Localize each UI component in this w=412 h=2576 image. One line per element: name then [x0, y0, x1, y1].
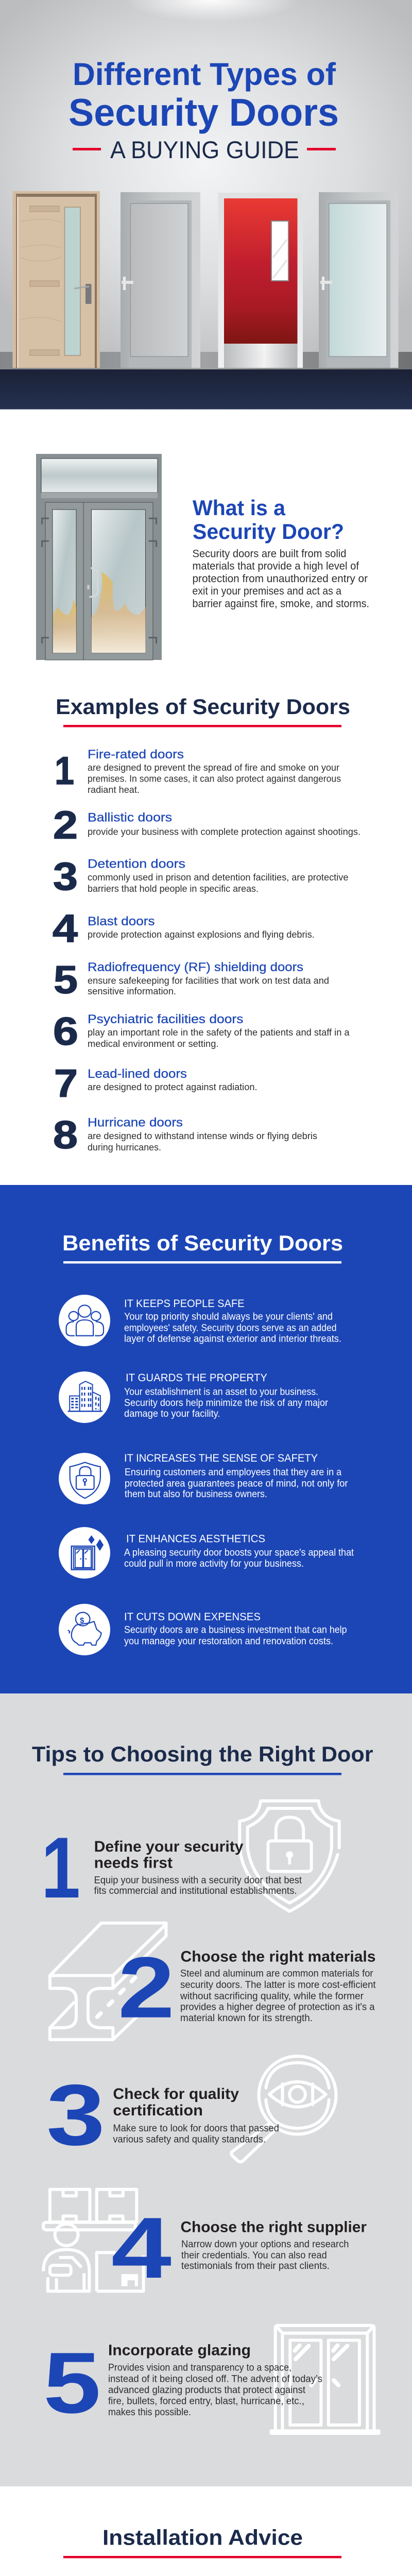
tip 1: Define your security: [94, 1838, 244, 1855]
tip 1: Equip your business with a security door that best: [94, 1875, 302, 1886]
list item 5: ensure safekeeping for facilities that work on test data and: [88, 976, 329, 986]
list item 2: [53, 804, 360, 847]
list item 5: [54, 958, 329, 1002]
tip 5: 5: [43, 2334, 101, 2431]
list item 5: Radiofrequency (RF) shielding doors: [88, 960, 303, 974]
heading: tips: Tips to Choosing the Right Door: [32, 1742, 373, 1766]
tip 3: 3: [46, 2066, 105, 2163]
tip 2: [118, 1939, 376, 2036]
list item 6: 6: [53, 1010, 78, 1054]
list item 3: [53, 855, 348, 899]
heading: benefits: Benefits of Security Doors: [62, 1231, 343, 1255]
benefit 1: employees' safety. Security doors serve as an added: [124, 1323, 337, 1333]
tip 4: testimonials from their past clients.: [181, 2261, 330, 2272]
door: red fire door: [218, 193, 303, 368]
list item 7: are designed to protect against radiation.: [88, 1082, 258, 1092]
tip 5: fire, bullets, forced entry, blast, hurricane, etc.,: [108, 2396, 304, 2406]
heading: what is a security door: Security Door?: [193, 519, 344, 544]
list item 3: 3: [53, 855, 78, 899]
tip 5: advanced glazing products that protect against: [108, 2385, 306, 2396]
heading: examples of security doors: Examples of Security Doors: [56, 694, 350, 719]
list item 8: Hurricane doors: [88, 1116, 183, 1130]
benefit 5: Security doors are a business investment that can help: [124, 1625, 347, 1635]
tip 2: security doors. The latter is more cost-efficient: [180, 1979, 376, 1991]
benefit 4: IT ENHANCES AESTHETICS: [126, 1533, 265, 1545]
tip 4: 4: [111, 2199, 171, 2296]
text block: definition: materials that provide a high level of: [193, 561, 359, 572]
tip 3: various safety and quality standards.: [113, 2134, 266, 2145]
tip 1: 1: [41, 1819, 80, 1916]
door: grey steel: [121, 192, 200, 368]
benefit 2: Your establishment is an asset to your business.: [124, 1387, 318, 1397]
panel: benefits of security doors: [0, 1185, 412, 1693]
tip 5: instead of it being closed off. The advent of today’s: [108, 2374, 322, 2384]
benefit 3: protected area guarantees peace of mind, not only for: [125, 1479, 348, 1489]
icon: people: [66, 1305, 104, 1336]
tip 3: certification: [113, 2102, 203, 2119]
list item 7: 7: [54, 1062, 78, 1106]
tip 2: Steel and aluminum are common materials for: [180, 1968, 373, 1979]
list item 4: 4: [53, 907, 78, 951]
text block: definition: [193, 548, 369, 609]
benefit 1: [59, 1295, 341, 1346]
icon: window outline: [271, 2326, 379, 2433]
benefit 2: [59, 1371, 329, 1423]
list item 1: radiant heat.: [88, 785, 140, 795]
list item 3: barriers that hold people in specific areas.: [88, 884, 259, 894]
benefit 5: you manage your restoration and renovation costs.: [124, 1636, 333, 1647]
panel: what is a security door: [0, 410, 412, 1185]
benefit 2: IT GUARDS THE PROPERTY: [126, 1372, 267, 1384]
benefit 1: layer of defense against exterior and interior threats.: [124, 1334, 341, 1345]
floor strip: [0, 352, 412, 369]
tip 4: Choose the right supplier: [180, 2219, 367, 2236]
benefit 4: [59, 1527, 354, 1579]
tip 2: 2: [118, 1939, 175, 2036]
list item 8: 8: [53, 1113, 78, 1157]
list item 1: premises. In some cases, it can also protect against dangerous: [88, 774, 341, 784]
tip 1: [41, 1819, 302, 1916]
benefit 5: [59, 1604, 347, 1655]
tip 3: Make sure to look for doors that passed: [113, 2123, 279, 2134]
benefit 1: Your top priority should always be your clients' and: [124, 1312, 333, 1322]
tip 3: Check for quality: [113, 2086, 239, 2103]
icon: piggy bank: [68, 1613, 101, 1645]
door: frosted glass: [319, 192, 399, 368]
tip 5: Provides vision and transparency to a space,: [108, 2363, 291, 2374]
icon: shield with lock: [70, 1462, 100, 1498]
list item 4: Blast doors: [88, 914, 154, 928]
benefit 2: Security doors help minimize the risk of any major: [124, 1398, 329, 1409]
benefit 3: IT INCREASES THE SENSE OF SAFETY: [124, 1452, 318, 1464]
list item 3: Detention doors: [88, 857, 185, 871]
icon: shield and padlock outline: [239, 1801, 339, 1911]
tip 2: material known for its strength.: [180, 2013, 313, 2024]
list item 5: sensitive information.: [88, 986, 176, 996]
panel: hero header: [0, 0, 412, 409]
tip 1: needs first: [94, 1855, 173, 1872]
icon: piggy bank: $: [80, 1616, 84, 1625]
icon: buildings: [68, 1381, 102, 1411]
subtitle: A BUYING GUIDE: [110, 136, 299, 163]
icon: warehouse supplier outline: [43, 2190, 144, 2291]
panel: tips to choosing the right door: [0, 1693, 412, 2486]
list item 6: play an important role in the safety of the patients and staff in a: [88, 1027, 350, 1038]
list item 5: 5: [54, 958, 78, 1002]
list item 4: [53, 907, 315, 951]
tip 2: provides a higher degree of protection as it's a: [180, 2002, 375, 2012]
tip 4: their credentials. You can also read: [181, 2250, 327, 2261]
list item 4: provide protection against explosions and flying debris.: [88, 929, 315, 940]
list item 1: are designed to prevent the spread of fire and smoke on your: [88, 762, 339, 773]
benefit 3: Ensuring customers and employees that they are in a: [125, 1467, 341, 1478]
list item 2: Ballistic doors: [88, 810, 172, 824]
text block: definition: barrier against fire, smoke, and storms.: [193, 598, 369, 609]
benefit 3: [59, 1452, 348, 1504]
title: [68, 57, 339, 134]
list item 2: 2: [53, 804, 78, 847]
list item 2: provide your business with complete protection against shootings.: [88, 826, 360, 837]
tip 5: [43, 2334, 322, 2431]
benefit 5: IT CUTS DOWN EXPENSES: [124, 1611, 261, 1623]
text block: definition: protection from unauthorized entry or: [193, 573, 368, 585]
benefit 4: A pleasing security door boosts your space's appeal that: [124, 1547, 354, 1558]
tip 4: Narrow down your options and research: [181, 2239, 349, 2250]
title: Security Doors: [68, 91, 339, 134]
list item 8: [53, 1113, 317, 1157]
door: wood: [12, 191, 100, 368]
icon: sparkling door: [72, 1535, 104, 1570]
tip 5: makes this possible.: [108, 2407, 191, 2418]
heading: what is a security door: What is a: [193, 496, 286, 520]
tip 4: [111, 2199, 367, 2296]
list item 3: commonly used in prison and detention facilities, are protective: [88, 872, 348, 883]
text block: definition: Security doors are built from solid: [193, 548, 346, 560]
illustration: glass fire door: [36, 454, 162, 660]
title: Different Types of: [73, 57, 336, 92]
heading: what is a security door: [193, 496, 344, 544]
icon: magnifying glass with eye outline: [231, 2056, 336, 2162]
tip 2: Choose the right materials: [180, 1948, 376, 1965]
list item 1: [55, 748, 341, 795]
list item 8: are designed to withstand intense winds or flying debris: [88, 1131, 317, 1141]
benefit 3: them but also for business owners.: [125, 1489, 267, 1500]
list item 7: [54, 1062, 258, 1106]
icon: steel beam outline: [50, 1923, 166, 2040]
list item 1: Fire-rated doors: [88, 748, 184, 761]
list item 6: [53, 1010, 350, 1054]
tip 1: fits commercial and institutional establishments.: [94, 1886, 297, 1896]
heading: installation advice: Installation Advice: [102, 2526, 303, 2550]
navy band: [0, 369, 412, 409]
tip 5: Incorporate glazing: [108, 2342, 251, 2359]
benefit 4: could pull in more activity for your business.: [124, 1558, 304, 1569]
list item 1: 1: [55, 749, 74, 793]
panel: installation advice: [0, 2486, 412, 2576]
benefit 2: damage to your facility.: [124, 1409, 220, 1419]
list item 6: medical environment or setting.: [88, 1039, 218, 1049]
benefit 1: IT KEEPS PEOPLE SAFE: [124, 1298, 244, 1310]
tip 3: [46, 2066, 279, 2163]
heading: installation advice: [63, 2526, 341, 2558]
tip 2: without sacrificing quality, while the former: [180, 1991, 364, 2002]
list item 7: Lead-lined doors: [88, 1067, 187, 1081]
list item 6: Psychiatric facilities doors: [88, 1012, 243, 1026]
text block: definition: exit in your premises and act as a: [193, 585, 341, 597]
list item 8: during hurricanes.: [88, 1142, 161, 1153]
